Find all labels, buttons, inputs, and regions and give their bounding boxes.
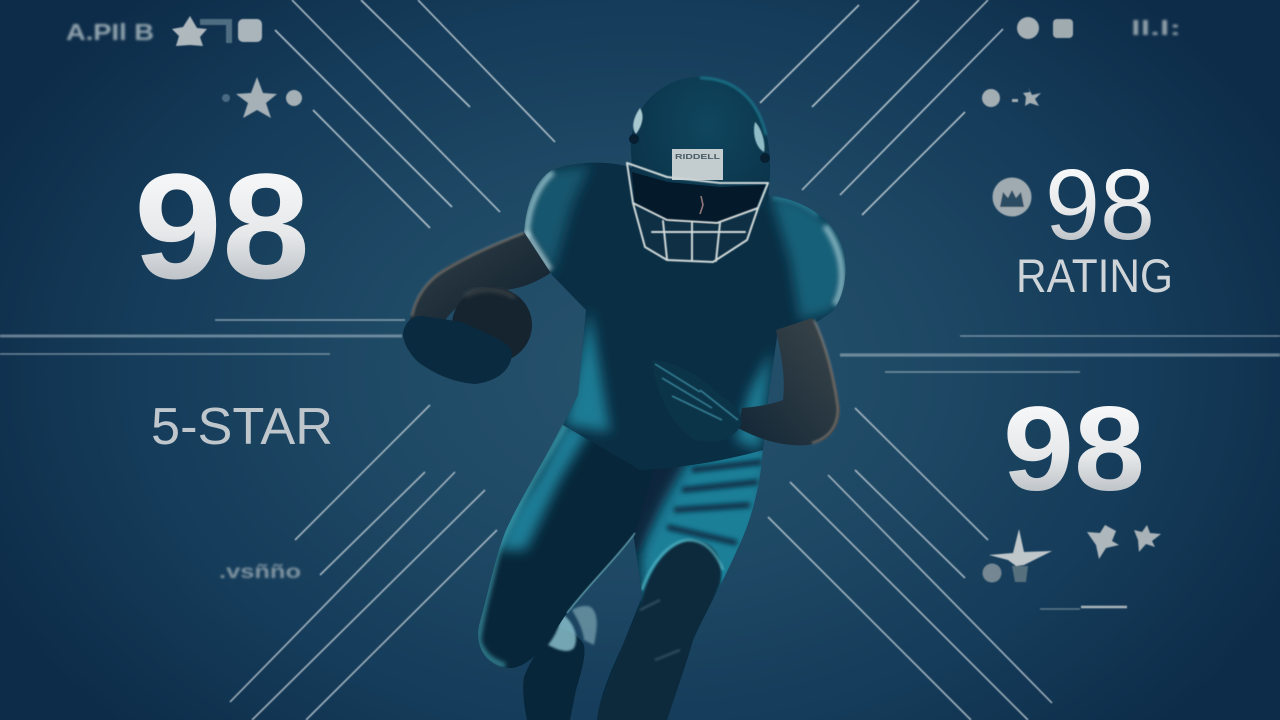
helmet logo left <box>633 108 643 134</box>
helmet <box>627 77 770 262</box>
crotch dark <box>634 465 694 558</box>
icons: upper right small row <box>982 87 1041 107</box>
thigh stripes <box>667 462 762 543</box>
caption text: lower left: .vsñño <box>219 562 301 583</box>
torso and jersey <box>524 163 846 470</box>
sleeve teal right <box>770 195 846 320</box>
icon: small face circle <box>982 564 1002 582</box>
front leg (right of image) <box>597 450 763 720</box>
sleeve teal left <box>524 165 590 275</box>
label: 5-STAR: 5-STAR <box>151 398 333 456</box>
icons: lower right stars <box>982 525 1161 609</box>
waist teal left <box>565 310 610 432</box>
thigh rim light <box>497 423 590 550</box>
back calf and foot <box>523 606 597 720</box>
heading: large 98 left: 98 <box>134 142 310 310</box>
icon: small circle upper right <box>982 89 1000 107</box>
waist teal right <box>735 350 772 450</box>
icon: rounded badge top left <box>238 19 262 42</box>
star row: upper left <box>222 77 302 118</box>
icon: rounded square top right <box>1053 19 1073 38</box>
icon: badge beside top right 98 <box>992 178 1032 216</box>
jersey highlight left sleeve hem <box>526 232 550 270</box>
thigh teal light <box>640 440 770 630</box>
shin rim wrinkles <box>640 600 680 660</box>
label: RATING: RATING <box>1016 249 1173 302</box>
player silhouette <box>403 77 846 720</box>
chin marking <box>700 196 703 214</box>
helmet label <box>672 149 723 180</box>
diagonal lines: bottom left <box>230 405 497 720</box>
icon: star upper left <box>236 77 277 118</box>
icons: top right row <box>1017 17 1181 40</box>
visor shadow <box>632 172 765 225</box>
horizontal lines: right <box>840 336 1280 372</box>
icon: small circle upper left <box>286 90 302 106</box>
helmet label text: RIDDELL <box>675 154 721 161</box>
caption text: top left: A.PIl B <box>66 19 154 45</box>
icon: circle top right <box>1017 17 1039 39</box>
glove on ball <box>403 316 512 384</box>
divider short line <box>1040 608 1080 610</box>
right arm <box>652 318 840 445</box>
knee arch light <box>642 540 723 590</box>
stat: 98 lower right: 98 <box>1003 382 1145 516</box>
icon: star top left <box>172 16 207 46</box>
left arm and ball <box>403 232 552 384</box>
icon: large star lower right <box>989 529 1052 566</box>
glove right hand <box>652 360 741 442</box>
icon: faded star base <box>1012 566 1028 582</box>
diagonal lines: top left <box>275 0 555 228</box>
icon: star right <box>1134 525 1161 552</box>
rear thigh (left of image) <box>478 423 636 668</box>
small icons: top left row <box>66 16 262 46</box>
diagonal lines: top right <box>760 0 1003 215</box>
jersey highlight left shoulder <box>527 172 553 238</box>
icon: glyph bar top left <box>200 19 232 43</box>
face mask <box>627 163 768 262</box>
jersey highlight right sleeve <box>825 226 842 305</box>
stat: 98 top right: 98 <box>1045 149 1155 261</box>
icon: dash and star upper right <box>1012 87 1041 106</box>
knee dark <box>640 539 723 638</box>
diagonal lines: bottom right <box>768 408 1052 720</box>
icon: star middle <box>1087 525 1119 559</box>
football <box>452 287 532 363</box>
horizontal lines: left <box>0 320 405 354</box>
helmet side knobs <box>629 134 639 144</box>
lower mask shadow <box>636 207 757 262</box>
helmet logo right <box>754 122 765 152</box>
caption text: top right: ll.l: <box>1131 18 1181 40</box>
